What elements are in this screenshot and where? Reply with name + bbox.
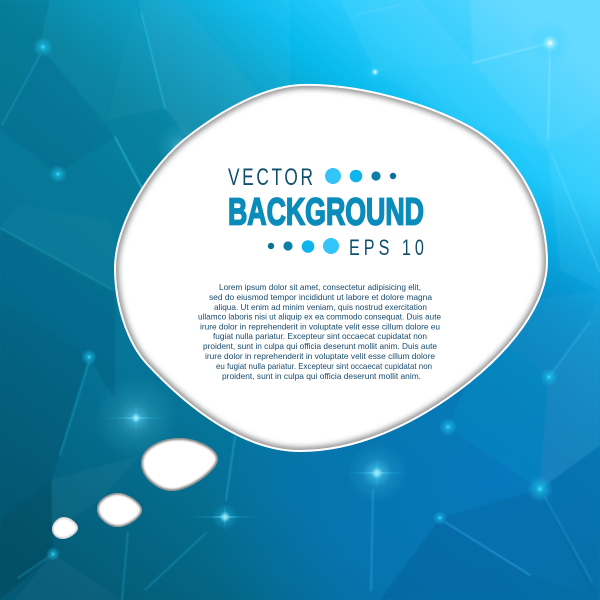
thought bubble: small [52, 517, 78, 539]
heading: VECTOR: VECTOR [228, 164, 313, 191]
body text: Lorem ipsum dolor sit amet, consectetur adipisicing elit, [219, 282, 421, 292]
body text: irure dolor in reprehenderit in voluptate velit esse cillum dolore eu [200, 322, 440, 332]
body text: proident, sunt in culpa qui officia deserunt mollit anim. Duis aute [203, 341, 437, 351]
body text: aliqua. Ut enim ad minim veniam, quis nostrud exercitation [214, 302, 427, 312]
body text: fugiat nulla pariatur. Excepteur sint occaecat cupidatat non [213, 331, 427, 341]
body text: ullamco laboris nisi ut aliquip ex ea commodo consequat. Duis aute [198, 312, 441, 322]
body text: proident, sunt in culpa qui officia deserunt mollit anim. [222, 371, 421, 381]
dots row: bottom [268, 238, 339, 254]
thought bubble: medium [97, 493, 142, 527]
thought bubble: large [141, 438, 218, 491]
heading: BACKGROUND: BACKGROUND [228, 191, 424, 233]
body text [198, 282, 441, 381]
speech bubble [115, 85, 547, 451]
body text: sed do eiusmod tempor incididunt ut labore et dolore magna [209, 292, 432, 302]
body text: irure dolor in reprehenderit in voluptate velit esse cillum dolore [205, 351, 435, 361]
heading: EPS 10: EPS 10 [349, 235, 424, 261]
dots row: top [325, 168, 396, 184]
body text: eu fugiat nulla pariatur. Excepteur sint occaecat cupidatat non [216, 361, 432, 371]
